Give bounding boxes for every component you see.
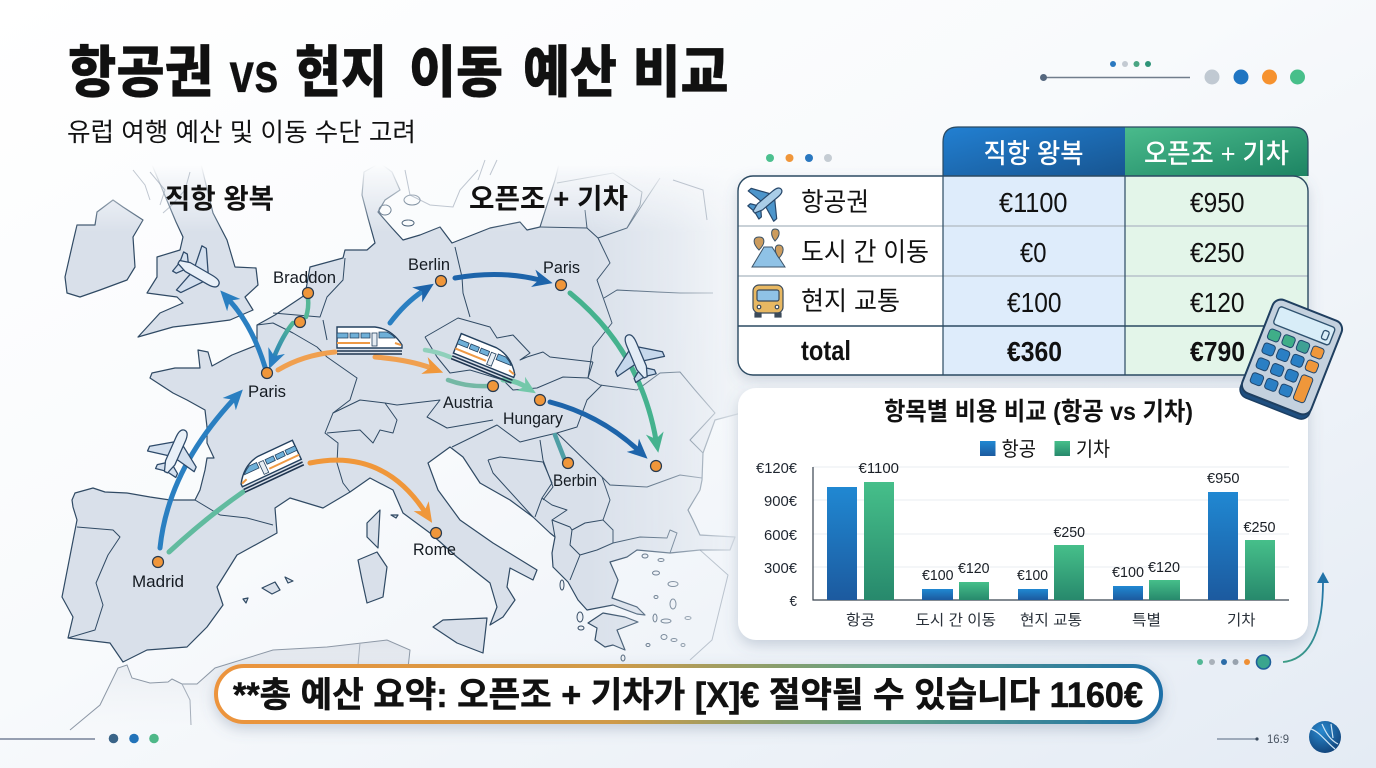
- city labels: Hungary: [503, 409, 563, 428]
- city dots: [152, 276, 662, 568]
- top right decoration: [1040, 61, 1305, 84]
- city labels: Madrid: [132, 572, 184, 591]
- title: 항공권: [68, 41, 213, 104]
- bar value labels: €250: [1054, 524, 1085, 541]
- y axis labels: 600€: [764, 527, 798, 544]
- row: intercity transfer: [752, 229, 1244, 268]
- scandinavia and scottish isles outlines: [133, 160, 728, 660]
- bar value labels: €120: [958, 560, 990, 577]
- route: to hungary: [503, 380, 526, 387]
- y axis labels: €120€: [756, 460, 798, 477]
- category labels: [846, 612, 1256, 629]
- bottom left decoration: [0, 734, 159, 743]
- legend: 항공: [1002, 438, 1036, 461]
- icon: calculator: [1237, 297, 1345, 422]
- row: local transit: €100: [1007, 287, 1062, 318]
- row: total: [801, 335, 1245, 367]
- row: total: €790: [1190, 336, 1245, 367]
- route: hungary to romania: [550, 402, 638, 450]
- title: vs: [230, 41, 278, 104]
- row: intercity transfer: €250: [1190, 237, 1244, 268]
- column header: open-jaw: 오픈조 + 기차: [1144, 139, 1289, 169]
- row: intercity transfer: 도시 간 이동: [801, 237, 929, 267]
- category labels: 도시 간 이동: [916, 612, 996, 629]
- table dots: [766, 154, 832, 162]
- chart title: 항목별 비용 비교 (항공 vs 기차): [884, 398, 1193, 426]
- city labels: Austria: [443, 393, 494, 412]
- route: paris to uk: [229, 300, 265, 367]
- route: madrid green: [169, 492, 243, 552]
- route: teal behind train: [425, 350, 450, 357]
- icon: plane over uk: [165, 239, 231, 307]
- row: total: €360: [1007, 336, 1062, 367]
- route: to austria dot: [448, 380, 488, 386]
- y axis labels: [756, 460, 798, 610]
- row: airfare: [741, 174, 1244, 228]
- row: intercity transfer: €0: [1020, 237, 1046, 268]
- europe map: [62, 160, 790, 662]
- bar value labels: €950: [1207, 470, 1240, 487]
- route: orange to austria: [375, 357, 431, 368]
- column header: open-jaw: [1125, 127, 1308, 176]
- bars: flight series: [827, 487, 1238, 600]
- bar value labels: €100: [1017, 567, 1048, 584]
- route: paris to romania: [570, 293, 656, 440]
- aspect ratio note: [1217, 732, 1289, 746]
- column header: direct: [943, 127, 1125, 176]
- logo: [1309, 721, 1341, 753]
- bar value labels: €120: [1148, 559, 1180, 576]
- icon: map pins: [752, 229, 785, 267]
- icon: plane over east europe: [604, 325, 669, 388]
- city labels: Paris: [543, 258, 580, 277]
- row: airfare: €1100: [999, 187, 1068, 218]
- icon: bus: [753, 285, 783, 317]
- north africa coast: [70, 640, 410, 730]
- route: madrid to paris: [160, 399, 234, 548]
- city labels: Berlin: [408, 255, 450, 274]
- row: local transit: €120: [1190, 287, 1244, 318]
- icon: train tilted east: [451, 334, 522, 383]
- row: local transit: 현지 교통: [801, 286, 900, 316]
- y axis labels: 300€: [764, 560, 798, 577]
- title: 현지: [295, 41, 387, 104]
- y axis labels: 900€: [764, 493, 798, 510]
- city labels: Paris: [248, 382, 286, 401]
- route: braddon link: [306, 298, 308, 317]
- icon: plane over atlantic: [142, 420, 208, 483]
- row: airfare: €950: [1190, 187, 1244, 218]
- icon: train central: [337, 327, 402, 354]
- icon: train france: [234, 440, 304, 492]
- city labels: [132, 255, 597, 591]
- summary banner: [216, 666, 1161, 722]
- route: to berbin: [555, 435, 564, 458]
- column fills: [943, 176, 1308, 375]
- city labels: Braddon: [273, 268, 336, 287]
- aspect ratio note: 16:9: [1267, 732, 1289, 746]
- icon: plane: [741, 174, 794, 228]
- category labels: 기차: [1227, 612, 1256, 629]
- bar value labels: €100: [1112, 564, 1144, 581]
- title: 비교: [632, 41, 728, 104]
- bars: train series: [864, 482, 1275, 600]
- y axis labels: €: [790, 593, 798, 610]
- legend: 기차: [1076, 438, 1110, 461]
- growth arrow with dots: [1197, 572, 1329, 669]
- route: berlin to paris: [455, 274, 540, 280]
- title: 예산: [523, 41, 617, 104]
- summary banner: **총 예산 요약: 오픈조 + 기차가 [X]€ 절약될 수 있습니다 1160€: [233, 676, 1143, 715]
- title: [68, 41, 728, 104]
- chart card: [738, 388, 1308, 640]
- heading: open-jaw plus train: 오픈조 + 기차: [469, 183, 628, 214]
- legend: [980, 438, 1110, 461]
- category labels: 특별: [1132, 612, 1161, 629]
- bar value labels: [858, 460, 1276, 584]
- column header: direct: 직항 왕복: [984, 139, 1084, 169]
- title: 이동: [409, 41, 503, 104]
- category labels: 항공: [846, 612, 875, 629]
- city labels: Rome: [413, 540, 456, 559]
- route: to berlin: [390, 291, 423, 323]
- bar value labels: €1100: [858, 460, 899, 477]
- subtitle: 유럽 여행 예산 및 이동 수단 고려: [67, 119, 416, 147]
- row: local transit: [753, 285, 1244, 318]
- bar value labels: €100: [922, 567, 954, 584]
- row: airfare: 항공권: [801, 187, 869, 217]
- category labels: 현지 교통: [1020, 612, 1082, 629]
- routes: [160, 274, 656, 552]
- row: total: total: [801, 335, 851, 366]
- route: to rome: [310, 460, 425, 512]
- city labels: Berbin: [553, 471, 597, 490]
- heading: direct round trip: 직항 왕복: [165, 183, 274, 214]
- route: to paris: [274, 323, 293, 357]
- bar value labels: €250: [1244, 519, 1276, 536]
- route: paris east orange: [278, 352, 335, 370]
- comparison table: [738, 127, 1308, 375]
